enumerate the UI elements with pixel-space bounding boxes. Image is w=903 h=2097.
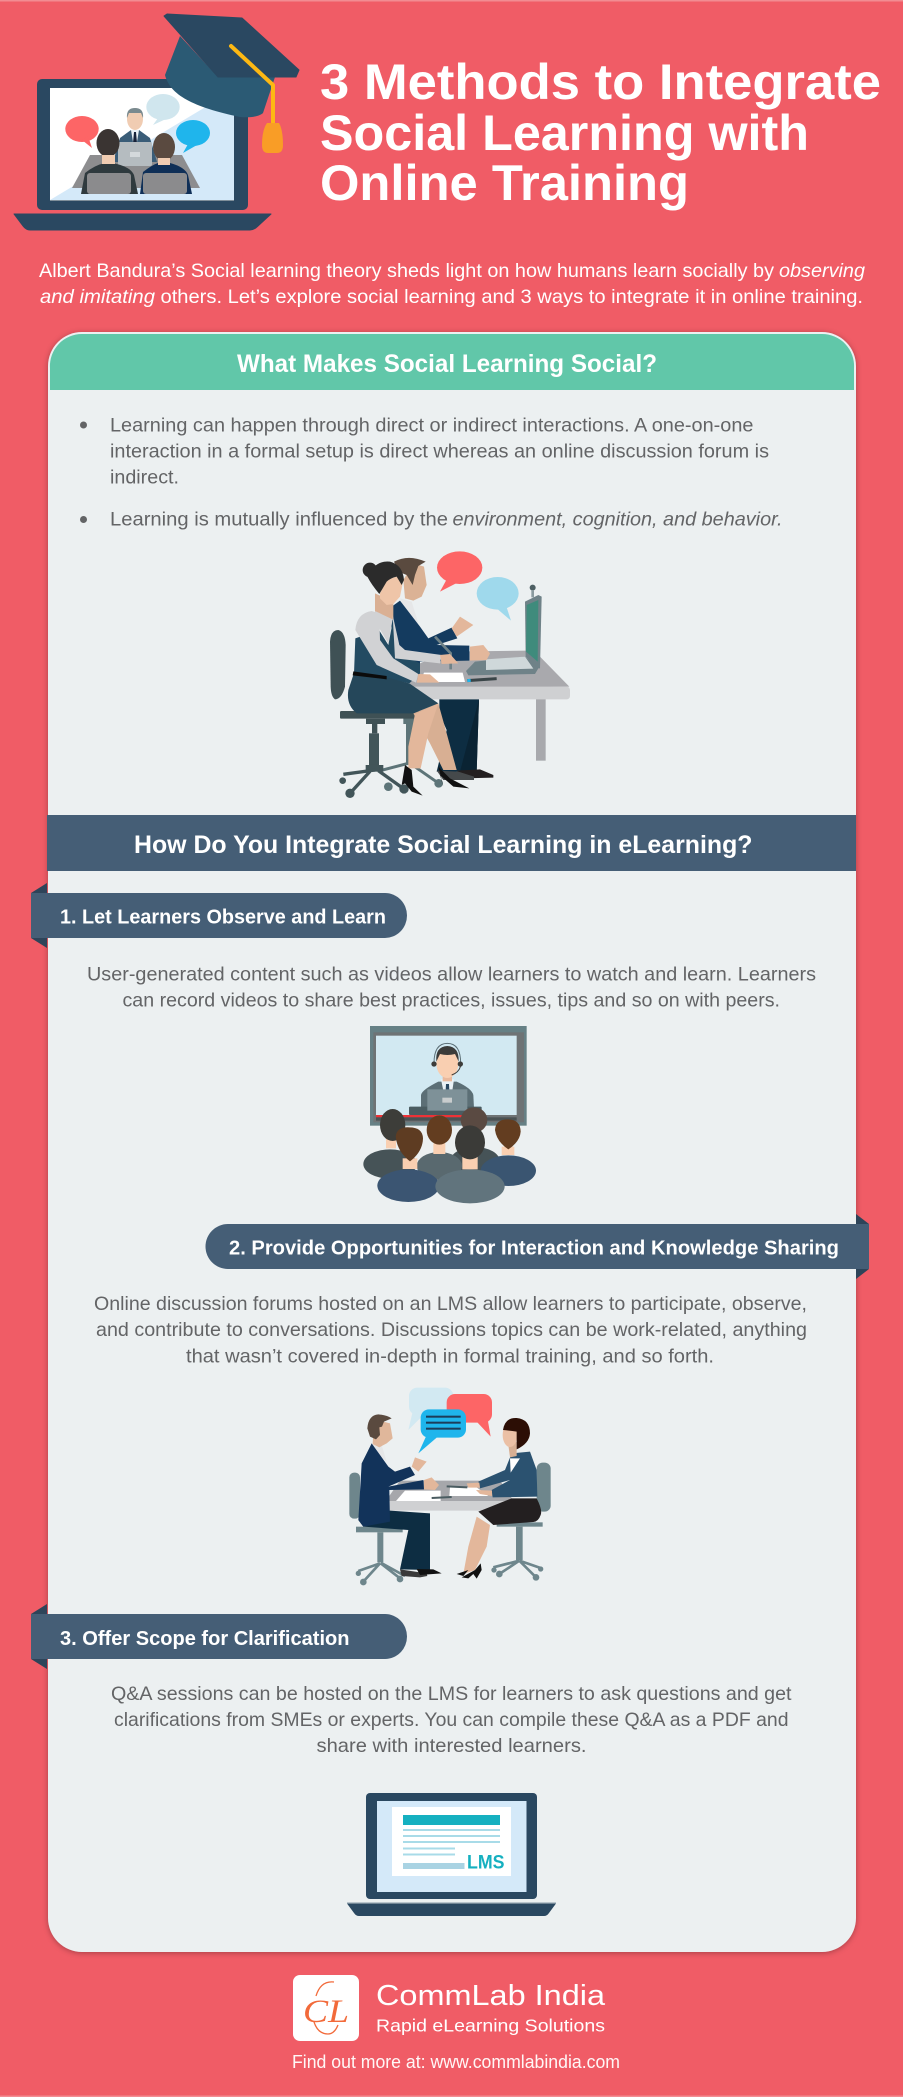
speech bubbles in laptop [65, 94, 210, 153]
bullet list [80, 414, 782, 530]
icon: CL logo: CL [303, 1994, 349, 2030]
title [320, 54, 881, 211]
ribbon: step 2 [206, 1214, 869, 1279]
text: step 3 body [111, 1683, 792, 1757]
video screen [370, 1026, 527, 1126]
section header: how do you integrate [47, 815, 856, 871]
intro paragraph: Albert Bandura’s Social learning theory sheds light on how humans learn socially by [39, 260, 774, 282]
intro paragraph [39, 260, 865, 308]
illustration: two people in discussion [349, 1388, 551, 1585]
tagline: Rapid eLearning Solutions [376, 2016, 605, 2036]
table [385, 1481, 514, 1511]
intro paragraph: others. Let’s explore social learning and 3 ways to integrate it in online training. [160, 286, 863, 308]
speech bubbles [408, 1388, 492, 1453]
bullet list: interaction in a formal setup is direct whereas an online discussion forum is [110, 440, 769, 462]
bullet list: Learning is mutually influenced by the [110, 508, 448, 530]
title: Online Training [320, 155, 689, 211]
icon: LMS laptop [347, 1793, 556, 1916]
text: step 3 body: clarifications from SMEs or experts. You can compile these Q&A as a PDF and [114, 1709, 788, 1731]
text: step 2 body: Online discussion forums hosted on an LMS allow learners to participate, observe, [94, 1293, 807, 1315]
bullet list: indirect. [110, 466, 179, 488]
man [389, 558, 493, 780]
speech bubbles [437, 551, 519, 621]
ribbon: step 1 [31, 883, 407, 948]
text: step 2 body: that wasn’t covered in-depth in formal training, and so forth. [186, 1346, 714, 1368]
icon: laptop with graduation cap [14, 14, 299, 230]
section header: how do you integrate: How Do You Integrate Social Learning in eLearning? [134, 831, 752, 859]
laptop with webcam [466, 585, 542, 675]
brand name: CommLab India [376, 1980, 606, 2012]
ribbon: step 3: 3. Offer Scope for Clarification [60, 1628, 350, 1650]
chair [330, 630, 443, 798]
bullet list: Learning can happen through direct or indirect interactions. A one-on-one [110, 414, 754, 436]
desk [406, 651, 570, 761]
graduation cap [164, 14, 299, 153]
meeting scene in laptop [72, 108, 200, 194]
text: step 1 body: User-generated content such as videos allow learners to watch and learn. Learners [87, 964, 816, 986]
text: step 3 body: share with interested learners. [316, 1735, 586, 1757]
text: step 2 body: and contribute to conversations. Discussions topics can be work-related, anything [96, 1319, 807, 1341]
icon: CL logo [293, 1975, 359, 2041]
panel: main card [31, 332, 869, 1952]
text: step 1 body [87, 964, 816, 1012]
bullet list: environment, cognition, and behavior. [452, 508, 782, 530]
section header: what makes social learning social: What Makes Social Learning Social? [237, 350, 657, 378]
woman with chair [457, 1418, 551, 1581]
ribbon: step 3 [31, 1604, 407, 1669]
ribbon: step 2: 2. Provide Opportunities for Interaction and Knowledge Sharing [229, 1238, 839, 1260]
icon: LMS laptop: LMS [467, 1853, 504, 1874]
section header: what makes social learning social [50, 334, 854, 390]
woman [348, 562, 469, 796]
man with chair [349, 1414, 442, 1585]
title: 3 Methods to Integrate [320, 54, 881, 110]
ribbon: step 1: 1. Let Learners Observe and Learn [60, 906, 386, 928]
title: Social Learning with [320, 105, 809, 161]
illustration: two people at desk with laptop [330, 551, 570, 798]
intro paragraph: observing [779, 260, 865, 282]
text: step 2 body [94, 1293, 807, 1368]
text: step 3 body: Q&A sessions can be hosted on the LMS for learners to ask questions and get [111, 1683, 792, 1705]
footer: CommLab India logo [292, 1975, 620, 2072]
audience [363, 1107, 536, 1203]
presenter [409, 1043, 482, 1115]
website line: Find out more at: www.commlabindia.com [292, 2051, 620, 2072]
text: step 1 body: can record videos to share best practices, issues, tips and so on with peers. [122, 990, 780, 1012]
illustration: video presenter and audience [363, 1026, 536, 1203]
desk microphone [435, 637, 451, 669]
intro paragraph: and imitating [40, 286, 155, 308]
